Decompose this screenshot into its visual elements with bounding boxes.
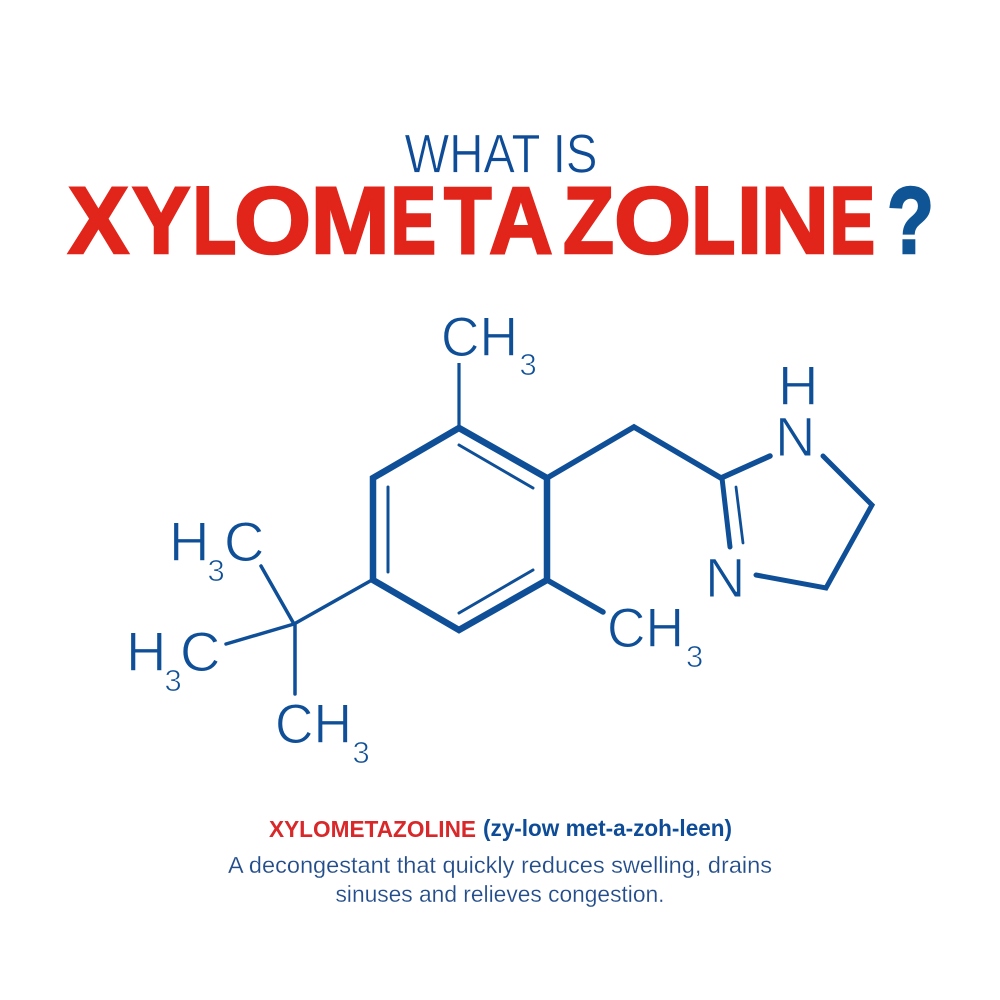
heading: xylometazoline: M bbox=[311, 168, 390, 274]
heading: xylometazoline: Y bbox=[132, 168, 191, 274]
label: lower H3C bbox=[126, 620, 220, 698]
heading: xylometazoline: L bbox=[692, 168, 735, 274]
heading: xylometazoline: N bbox=[761, 168, 829, 274]
benzene ring bbox=[373, 428, 547, 630]
label: upper H3C: H bbox=[169, 510, 209, 573]
label: upper H3C: 3 bbox=[208, 553, 225, 588]
caption bbox=[228, 815, 772, 907]
heading: xylometazoline bbox=[66, 168, 874, 274]
imidazoline ring bbox=[756, 456, 872, 588]
label: lower H3C: H bbox=[126, 620, 166, 683]
heading: xylometazoline: E bbox=[830, 168, 874, 274]
label: bottom CH3: CH bbox=[275, 692, 352, 755]
description: sinuses and relieves congestion. bbox=[336, 881, 664, 907]
heading: xylometazoline: Z bbox=[563, 168, 614, 274]
heading: xylometazoline: E bbox=[391, 168, 435, 274]
label: right CH3: CH bbox=[607, 596, 684, 659]
heading: xylometazoline: X bbox=[68, 168, 129, 274]
label: top CH3: 3 bbox=[520, 347, 537, 382]
label: right CH3: 3 bbox=[686, 639, 703, 674]
heading: xylometazoline: O bbox=[234, 168, 311, 274]
chemical structure bbox=[226, 363, 872, 694]
pronunciation line: (zy-low met-a-zoh-leen) bbox=[483, 815, 732, 841]
label: bottom CH3 bbox=[275, 692, 370, 770]
atom labels bbox=[126, 305, 818, 770]
heading: what is: WHAT IS bbox=[404, 122, 598, 184]
heading: xylometazoline: T bbox=[444, 168, 491, 274]
label: lower H3C: 3 bbox=[164, 663, 182, 698]
description bbox=[228, 852, 772, 907]
label: bottom CH3: 3 bbox=[352, 735, 370, 770]
label: upper H3C: C bbox=[224, 510, 264, 573]
heading: xylometazoline: A bbox=[489, 168, 553, 274]
label: top CH3: CH bbox=[441, 305, 518, 368]
label: upper N: N bbox=[775, 405, 815, 468]
pronunciation line: XYLOMETAZOLINE bbox=[269, 816, 476, 842]
title bbox=[66, 122, 934, 274]
description: A decongestant that quickly reduces swelling, drains bbox=[228, 852, 772, 878]
methylene linker bbox=[547, 427, 770, 478]
imidazoline double bond bbox=[722, 478, 743, 547]
label: lower H3C: C bbox=[180, 620, 220, 683]
label: right CH3 bbox=[607, 596, 703, 674]
pronunciation line bbox=[269, 815, 732, 842]
ring inner double bonds bbox=[388, 445, 533, 613]
bond to top methyl bbox=[457, 363, 461, 428]
tert-butyl bonds bbox=[226, 566, 372, 694]
heading: xylometazoline: I bbox=[737, 168, 762, 274]
label: H on nitrogen: H bbox=[778, 354, 818, 417]
heading: xylometazoline: O bbox=[614, 168, 691, 274]
label: upper H3C bbox=[169, 510, 264, 588]
label: lower N: N bbox=[705, 546, 745, 609]
label: top CH3 bbox=[441, 305, 537, 382]
heading: xylometazoline: L bbox=[193, 168, 236, 274]
heading: question mark: ? bbox=[887, 168, 934, 274]
bond to right methyl bbox=[547, 580, 603, 612]
